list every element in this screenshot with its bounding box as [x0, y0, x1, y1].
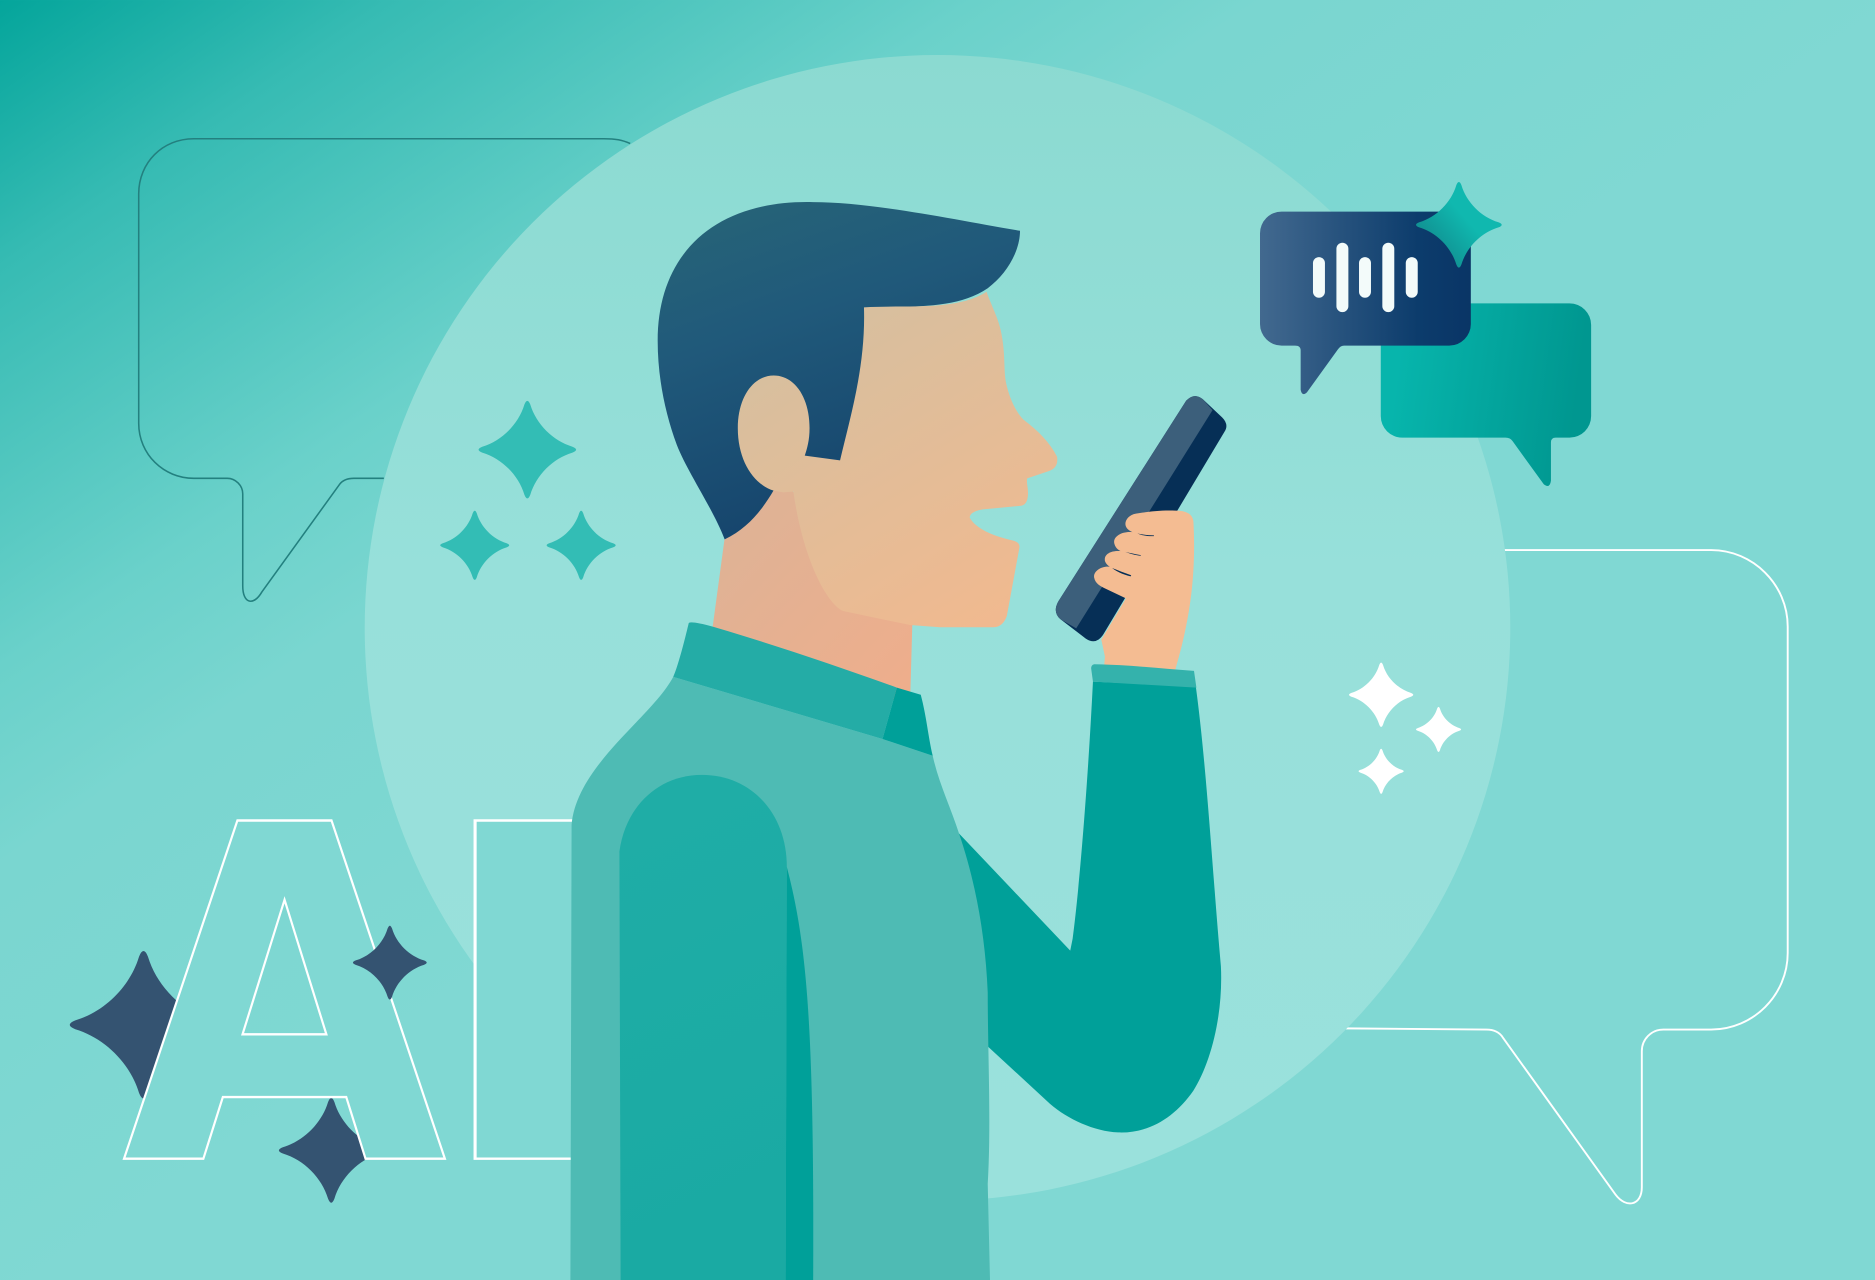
- outlined letters: AI: [122, 728, 644, 1269]
- speech bubble outline: right: [1345, 550, 1788, 1203]
- far arm sleeve: [945, 682, 1221, 1132]
- sparkle: dark star on letter A: [353, 926, 427, 1000]
- sparkles: dark stars behind letter A: [70, 951, 384, 1203]
- navy chat bubble: [1260, 212, 1471, 394]
- outlined letters: AI: I: [420, 728, 644, 1268]
- collar inner: [882, 688, 933, 756]
- phone and hand: [1056, 396, 1226, 688]
- hand: [1094, 510, 1194, 677]
- sparkles: white group: [1349, 663, 1461, 794]
- sleeve cuff: [1091, 664, 1196, 688]
- man: [570, 202, 1221, 1280]
- finger gaps: [1112, 533, 1154, 576]
- speech bubble outline: left: [139, 139, 630, 601]
- phone body: [1056, 396, 1226, 641]
- teal chat bubble: [1381, 303, 1591, 486]
- shirt torso: [570, 677, 990, 1280]
- large background circle: [365, 55, 1510, 1201]
- neck: [706, 490, 912, 706]
- chat icon: [1260, 182, 1591, 486]
- near arm sleeve: [619, 775, 787, 1280]
- face and ear: [738, 292, 1057, 627]
- near arm shadow strip: [786, 867, 813, 1280]
- sparkles: teal group: [440, 401, 616, 580]
- sparkle on chat bubble: [1416, 182, 1502, 268]
- shirt collar: [673, 622, 897, 739]
- outlined letters: AI: A: [122, 729, 450, 1269]
- hair: [658, 202, 1020, 539]
- sound wave bars: [1313, 243, 1418, 312]
- phone lighter side: [1056, 396, 1213, 628]
